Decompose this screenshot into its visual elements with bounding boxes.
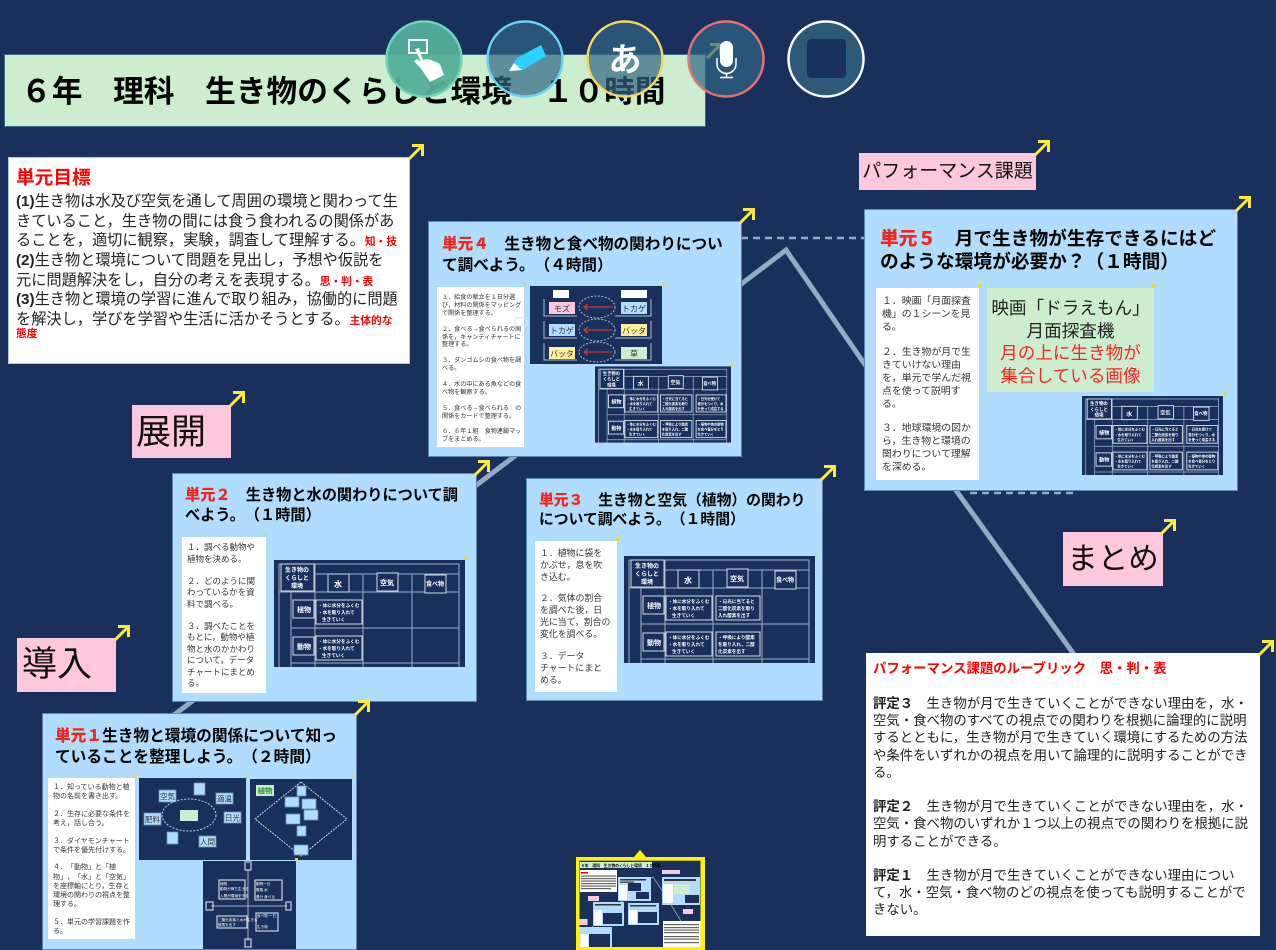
text: unit 2 steps: １．調べる動物や — [187, 542, 255, 552]
chart: idea map: 空気 — [160, 791, 175, 801]
thumbnail: slide minimap — [576, 850, 705, 950]
thumbnail: slide minimap: ６年 理科 生き物のくらしと環境 １０時間 — [581, 863, 661, 868]
text: rubric levels: て，水・空気・食べ物のどの視点を使っても説明することがで — [873, 885, 1246, 900]
chart: data chart: 化炭素を出す — [662, 431, 682, 436]
text: unit goals body: きていること，生き物の間には食う食われるの関係があ — [16, 213, 394, 230]
chart: idea map: 日光 — [225, 812, 240, 822]
chart: data chart: 水 — [334, 579, 342, 589]
text: unit goals body: (2)生き物と環境について問題を見出し，予想や仮説を — [16, 252, 383, 269]
chart: data chart: ・水を取り入れて — [1114, 432, 1141, 437]
chart: data chart: 化炭素を出す — [1151, 464, 1172, 469]
text: unit 1 steps: １．知っている動物と植 — [53, 784, 130, 791]
chart: data chart: ・日光を受けて — [1188, 427, 1212, 432]
text: unit 2 steps: 植物を決める。 ２．どのように関 — [187, 554, 255, 586]
chart: food chain candy chart: 草 — [630, 348, 638, 358]
arrow: goals — [409, 146, 422, 159]
heading: unit 3 — [539, 492, 805, 528]
chart: coordinate axes: 動物が育ち生きる — [220, 886, 249, 891]
chart: coordinate axes: 酸素を出す — [218, 922, 236, 927]
chart: data chart: 生きていく — [1188, 464, 1205, 469]
title text: ６年 理科 生き物のくらしと環境 １０時間 — [21, 74, 665, 109]
text: unit goals body: を解決し，学びを学習や生活に活かそうとする。主体的な — [16, 311, 392, 328]
text: unit goals body: ることを，適切に観察，実験，調査して理解する。知・技 — [16, 232, 397, 249]
text: unit 2 steps: もとに，動物や植 — [187, 632, 254, 642]
chart: data chart: 水 — [684, 575, 692, 585]
chart: data chart: 動物 — [1099, 456, 1109, 464]
chart: data chart: 動物 — [647, 638, 661, 647]
chart: data chart: ・日光に当てると — [1151, 427, 1178, 432]
chart: data chart: 食べ物 — [426, 580, 444, 588]
chart: data chart: ・水を取り入れて — [318, 609, 355, 616]
label: performance task: パフォーマンス課題 — [862, 161, 1033, 182]
text: unit 1 steps: を座標軸にとり，生存と — [53, 883, 130, 890]
chart: data chart: ・水を取り入れて — [626, 426, 652, 431]
chart: coordinate axes: 人間が環境を守る — [220, 893, 249, 898]
panel: unit goals — [8, 157, 410, 364]
label: development — [132, 405, 231, 458]
text: unit 3 steps: き込む。 ２．気体の割合 — [540, 572, 602, 603]
text: unit 5 steps: きていけない理由 — [882, 360, 961, 371]
text: unit 1 steps: 環境の関わりの視点を整 — [53, 892, 130, 899]
chart: food chain candy chart: バッタ — [622, 326, 646, 336]
chart: data chart: ・体に水分をふくむ — [668, 634, 710, 641]
chart: data chart: 空気 — [730, 574, 744, 583]
chart: food chain candy chart: トカゲ — [550, 326, 574, 336]
chart: diamond chart — [250, 779, 352, 860]
chart: data chart: 生きていく — [672, 648, 695, 654]
text: rubric levels — [873, 696, 1248, 917]
chart: data chart: を食べ養分をとり — [1188, 458, 1215, 463]
text: rubric levels: 明することができる。 — [873, 834, 1007, 849]
panel: unit 3 — [526, 478, 823, 701]
arrow: unit 5 — [1236, 198, 1250, 211]
panel: unit 4 — [428, 221, 742, 457]
chart: data chart: 植物 — [297, 605, 311, 614]
text: rubric levels: 空気・食べ物のすべての視点での関わりを根拠に論理的に説明 — [873, 713, 1246, 728]
chart: data chart: 水 — [1126, 410, 1132, 418]
panel: unit 5 — [864, 209, 1238, 491]
heading: unit 2 — [185, 486, 458, 524]
chart: data chart: を取り入れ，二酸 — [718, 641, 755, 648]
heading: unit 4: て調べよう。（４時間） — [442, 257, 613, 274]
heading: unit 1: ていることを整理しよう。（２時間） — [55, 749, 321, 766]
chart: data chart — [595, 366, 731, 443]
chart: idea map — [139, 778, 246, 860]
arrow: unit 2 — [475, 462, 488, 475]
chart: data chart: 生きていく — [1117, 437, 1134, 442]
icon: hiragana button: あ — [608, 41, 642, 78]
text: unit 2 steps: チャートにまとめ — [187, 666, 255, 676]
chart: coordinate axes: 酸素 水 — [256, 887, 268, 892]
chart: data chart: くらしと — [635, 571, 659, 578]
chart: food chain candy chart — [530, 286, 662, 364]
arrow: unit 4 — [740, 210, 754, 223]
text: unit 3 steps: １．植物に袋を — [540, 548, 602, 558]
text: unit 4 steps: 係を，キャンディチャートに — [442, 334, 521, 341]
text: unit goals body: 態度 — [16, 328, 37, 340]
text: rubric levels: 評定３ 生き物が月で生きていくことができない理由を，水・ — [873, 696, 1248, 711]
chart: data chart — [1082, 396, 1223, 475]
chart: data chart: 生き物の — [285, 566, 309, 574]
heading: rubric: パフォーマンス課題のルーブリック 思・判・表 — [873, 661, 1167, 676]
chart: data chart: ・呼吸により酸素 — [718, 634, 755, 641]
text: unit 4 steps: べ物を観察する。 — [442, 389, 491, 396]
chart: data chart — [624, 556, 815, 663]
chart: data chart: 生き物の — [635, 562, 659, 570]
text: unit 2 steps: 物と水のかかわり — [187, 644, 255, 654]
text: rubric levels: するとともに，生き物が月で生きていく環境にするための方法 — [873, 730, 1247, 745]
text: unit 4 steps: ５．食べる→食べられる の — [442, 405, 521, 412]
text: unit 1 steps: 物」，「水」と「空気」 — [53, 874, 130, 881]
chart: data chart: 環境 — [1095, 412, 1104, 419]
chart: data chart: 環境 — [607, 381, 616, 388]
chart: data chart: 二酸化炭素を取り — [662, 401, 688, 406]
heading: unit 4 — [442, 236, 723, 274]
chart: coordinate axes: 生き物 — [257, 924, 268, 929]
chart: data chart: ・日光を受けて — [698, 396, 720, 401]
icon: touch button — [386, 22, 462, 96]
text: unit 5 steps: を，単元で学んだ視 — [882, 373, 971, 384]
text: unit 4 steps: ４．水の中にある魚などの食 — [442, 381, 521, 388]
chart: data chart: 環境 — [641, 578, 653, 586]
text: unit 4 steps: で関係を整理する。 — [442, 310, 497, 317]
icon: hiragana button — [588, 22, 662, 96]
chart: data chart: 生きていく — [322, 616, 345, 622]
chart: data chart: ・水を取り入れて — [1114, 458, 1141, 463]
chart: data chart — [274, 560, 465, 667]
chart: data chart: 環境 — [291, 582, 303, 590]
arrow: unit 1 — [355, 702, 368, 715]
text: unit 5 steps — [876, 288, 979, 480]
heading: unit 1 — [55, 727, 337, 766]
icon: pencil button — [488, 22, 562, 96]
text: unit 2 steps: 料で調べる。 ３．調べたことを — [187, 598, 255, 630]
chart: data chart: 水 — [638, 380, 644, 388]
text: rubric levels: る。 — [873, 765, 900, 780]
chart: data chart: を使って成長する — [1188, 437, 1215, 442]
icon: stop button — [788, 22, 864, 96]
chart: data chart: ・体に水分をふくむ — [668, 598, 710, 605]
text: unit goals body — [16, 192, 398, 340]
text: unit 5 steps: 関わりについて理解 — [882, 449, 971, 460]
arrow: summary — [1161, 520, 1174, 534]
icon: microphone button — [688, 22, 764, 96]
callout: movie image placeholder: 集合している画像 — [1000, 366, 1141, 386]
heading: unit 3: について調べよう。（１時間） — [539, 512, 745, 528]
chart: data chart: を使って成長する — [698, 406, 724, 411]
text: unit 1 steps: 理する。 ５．単元の学習課題を作 — [53, 901, 130, 926]
chart: data chart: 生きていく — [698, 431, 714, 436]
text: unit 3 steps — [535, 541, 617, 692]
arrow: development — [230, 392, 244, 406]
text: unit 5 steps: る。 ３．地球環境の図か — [882, 399, 971, 434]
chart: data chart: ・水を取り入れて — [668, 641, 705, 648]
text: unit 4 steps: プをまとめる。 — [442, 436, 485, 443]
chart: data chart: ・水を取り入れて — [668, 605, 705, 612]
text: unit 3 steps: を調べた後，日 — [540, 605, 602, 615]
chart: data chart: 生きていく — [1117, 464, 1134, 469]
chart: data chart: 空気 — [1160, 408, 1171, 416]
chart: data chart: ・体に水分をふくむ — [626, 396, 656, 401]
chart: data chart: 空気 — [670, 379, 680, 386]
text: unit 1 steps — [48, 778, 135, 939]
callout: movie image placeholder: 月面探査機 — [1026, 321, 1114, 341]
chart: data chart: ・植物や他の動物 — [1188, 453, 1216, 458]
chart: data chart: ・体に水分をふくむ — [318, 602, 360, 609]
chart: coordinate axes: 食べ物 一日 — [257, 913, 276, 918]
chart: diamond chart: 植物 — [258, 786, 273, 796]
heading: unit 2: 単元２ 生き物と水の関わりについて調 — [185, 487, 458, 504]
chart: data chart: 生き物の — [1090, 400, 1108, 407]
label: summary — [1063, 532, 1163, 586]
text: unit 5 steps: る。 ２．生き物が月で生 — [882, 322, 971, 358]
heading: unit 2: べよう。（１時間） — [185, 506, 321, 524]
label: performance task — [859, 153, 1036, 190]
chart: data chart: ・水を取り入れて — [318, 645, 355, 652]
text: rubric levels: 空気・食べ物のいずれか１つ以上の視点での関わりを根拠に説 — [873, 816, 1248, 831]
text: unit goals body: (3)生き物と環境の学習に進んで取り組み，協働的に問題 — [16, 291, 398, 308]
chart: food chain candy chart: トカゲ — [622, 304, 646, 314]
callout: movie image placeholder: 月の上に生き物が — [1000, 343, 1141, 363]
chart: data chart: 生き物の — [603, 370, 620, 377]
chart: data chart: ・体に水分をふくむ — [1114, 453, 1145, 458]
heading: unit 5: のような環境が必要か？（１時間） — [880, 251, 1179, 272]
chart: data chart: ・呼吸により酸素 — [662, 422, 689, 427]
chart: data chart: を食べ養分をとり — [698, 426, 724, 431]
text: unit 2 steps — [182, 537, 266, 693]
chart: data chart: くらしと — [603, 376, 620, 383]
text: unit 4 steps: べる。 — [442, 365, 460, 372]
chart: food chain candy chart: モズ — [554, 304, 570, 314]
chart: coordinate axes: 二酸化炭素と水が生きる — [218, 917, 258, 922]
text: unit 5 steps: １．映画「月面探査 — [882, 296, 971, 307]
text: unit 3 steps: かぶせ，息を吹 — [540, 560, 602, 570]
chart: data chart: 生きていく — [629, 406, 646, 411]
text: unit 5 steps: ら，生き物と環境の — [882, 436, 971, 447]
chart: data chart: ・体に水分をふくむ — [1114, 427, 1145, 432]
text: rubric levels: 評定１ 生き物が月で生きていくことができない理由につい — [873, 868, 1235, 883]
chart: data chart: 入れ酸素を出す — [1151, 437, 1176, 442]
chart: data chart: ・体に水分をふくむ — [626, 422, 656, 427]
chart: data chart: くらしと — [285, 575, 309, 582]
chart: data chart: 入れ酸素を出す — [718, 612, 751, 619]
panel: unit 1 — [42, 713, 357, 950]
chart: data chart: ・体に水分をふくむ — [318, 638, 360, 645]
chart: data chart: ・植物や他の動物 — [698, 422, 724, 427]
chart: coordinate axes — [203, 861, 296, 949]
chart: coordinate axes: 植物 — [220, 881, 228, 886]
text: unit 1 steps: 考え，話し合う。 ３．ダイヤモンチャート — [53, 820, 130, 845]
text: rubric levels: や条件をいずれかの視点を用いて論理的に説明することができ — [873, 748, 1248, 763]
arrow: performance task — [1035, 142, 1048, 155]
chart: data chart: を取り入れ，二酸 — [1151, 458, 1179, 463]
heading: unit 1: 単元１生き物と環境の関係について知っ — [55, 728, 337, 745]
callout: movie image placeholder: 映画「ドラえもん」 — [991, 298, 1150, 318]
text: unit 2 steps: について，データ — [187, 655, 254, 665]
toolbar: round tool buttons — [385, 20, 865, 98]
text: unit 3 steps: チャートにまと — [540, 662, 602, 672]
arrow: rubric — [1259, 642, 1272, 655]
callout: movie image placeholder — [987, 288, 1154, 392]
chart: data chart: ・呼吸により酸素 — [1151, 453, 1179, 458]
chart: idea map: 人間 — [200, 838, 215, 846]
arrow: introduction — [115, 626, 128, 640]
chart: food chain candy chart: バッタ — [550, 350, 574, 358]
chart: data chart: 養分をつくり，水 — [1188, 432, 1216, 437]
text: unit 4 steps: ２．食べる→食べられるの関 — [442, 326, 521, 333]
chart: data chart: 化炭素を出す — [718, 648, 746, 655]
text: unit 2 steps: る。 — [187, 678, 204, 688]
text: unit 4 steps: ３．ダンゴムシの食べ物を調 — [442, 357, 521, 364]
text: unit 4 steps: ６．６年１組 食物連鎖マッ — [442, 428, 521, 435]
text: rubric levels: きない。 — [873, 902, 927, 917]
text: unit goals body: (1)生き物は水及び空気を通して周囲の環境と関わって生 — [16, 193, 398, 210]
text: unit 3 steps: 光に当て，割合の — [540, 617, 610, 627]
text: unit 1 steps: 物の名前を書き出す。 ２．生存に必要な条件を — [53, 793, 130, 818]
title banner — [4, 54, 706, 127]
text: unit 1 steps: で条件を優先付けする。 ４．「動物」と「植 — [53, 847, 130, 871]
chart: idea map: 適温 — [217, 794, 232, 804]
chart: data chart: 食べ物 — [1194, 410, 1208, 417]
heading: unit goals: 単元目標 — [16, 167, 91, 188]
label: introduction — [17, 638, 116, 692]
chart: data chart: ・日光に当てると — [662, 396, 688, 401]
chart: data chart: 動物 — [611, 425, 621, 432]
chart: data chart: 生きていく — [322, 652, 345, 658]
chart: data chart: 食べ物 — [703, 380, 717, 387]
label: development: 展開 — [136, 413, 206, 452]
chart: data chart: 二酸化炭素を取り — [718, 605, 755, 612]
text: unit 5 steps: 点を使って説明す — [882, 386, 961, 397]
chart: data chart: 植物 — [647, 601, 661, 610]
arrow: title — [707, 44, 720, 58]
text: unit 4 steps — [437, 287, 524, 447]
chart: data chart: 動物 — [297, 642, 311, 651]
heading: unit 5: 単元５ 月で生き物が生存できるにはど — [880, 228, 1216, 249]
label: summary: まとめ — [1067, 542, 1159, 576]
chart: data chart: 入れ酸素を出す — [662, 406, 686, 411]
text: unit 5 steps: 機」の１シーンを見 — [882, 309, 970, 320]
label: introduction: 導入 — [22, 645, 92, 684]
text: unit 4 steps: １．給食の献立を１日分選 — [442, 294, 515, 301]
chart: data chart: くらしと — [1090, 406, 1108, 413]
text: unit 2 steps: わっているかを資 — [187, 587, 255, 597]
heading: unit 3: 単元３ 生き物と空気（植物）の関わり — [539, 493, 805, 509]
panel: performance task rubric — [866, 653, 1260, 936]
chart: data chart: ・水を取り入れて — [626, 401, 652, 406]
chart: data chart: 養分をつくり，水 — [698, 401, 724, 406]
chart: data chart: 食べ物 — [776, 576, 794, 584]
chart: data chart: 二酸化炭素を取り — [1151, 432, 1178, 437]
text: unit 5 steps: を深める。 — [882, 462, 931, 473]
chart: data chart: 植物 — [611, 398, 621, 405]
panel: unit 2 — [172, 473, 477, 702]
chart: data chart: 植物 — [1099, 428, 1109, 436]
text: unit 4 steps: 整理する。 — [442, 341, 472, 348]
chart: idea map: 肥料 — [145, 814, 160, 824]
text: unit 4 steps: び，材料の関係をマッピング — [442, 302, 521, 309]
chart: data chart: を取り入れ，二酸 — [662, 426, 689, 431]
text: unit 1 steps: る。 — [53, 928, 67, 935]
text: unit 4 steps: 関係をカードで整理する。 — [442, 413, 515, 420]
text: unit 3 steps: 変化を調べる。 ３．データ — [540, 629, 602, 660]
chart: data chart: ・日光に当てると — [718, 598, 755, 605]
chart: data chart: 生きていく — [629, 431, 646, 436]
arrow: unit 3 — [821, 466, 834, 480]
text: unit 3 steps: める。 — [540, 674, 567, 684]
chart: data chart: 生きていく — [672, 612, 695, 618]
chart: data chart: 空気 — [380, 578, 394, 587]
chart: coordinate axes: 動物一日 — [256, 881, 270, 886]
text: rubric levels: 評定２ 生き物が月で生きていくことができない理由を，水・ — [873, 799, 1248, 814]
heading: unit 4: 単元４ 生き物と食べ物の関わりについ — [442, 236, 723, 253]
text: unit goals body: 元に問題解決をし，自分の考えを表現する。思・判・表 — [16, 272, 373, 289]
heading: unit 5 — [880, 228, 1216, 272]
chart: coordinate axes: 養分 食べる — [256, 894, 275, 899]
